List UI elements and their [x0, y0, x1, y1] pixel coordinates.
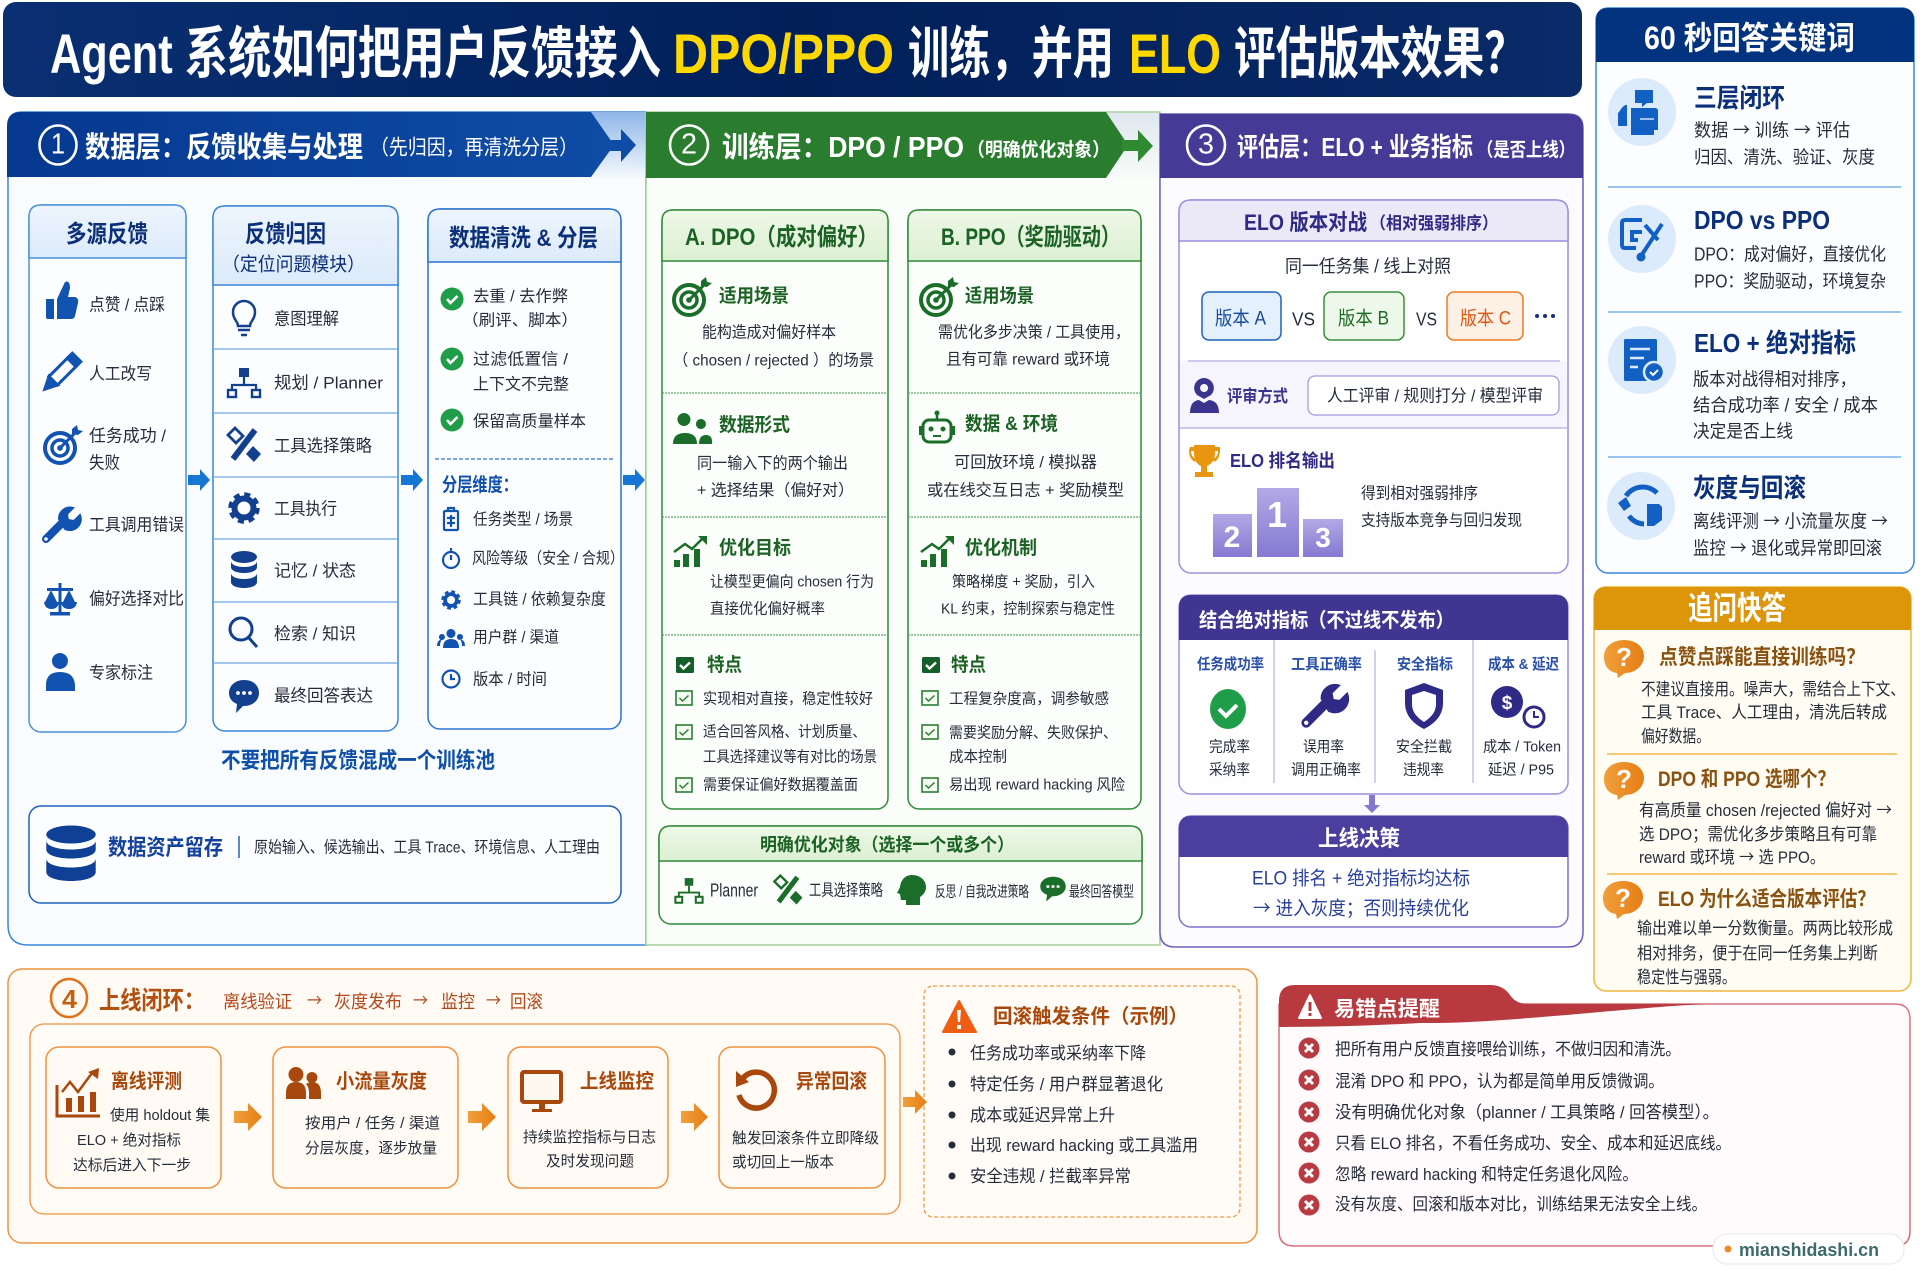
- step: canary release: 小流量灰度: [336, 1070, 427, 1093]
- icon: check: [440, 408, 464, 432]
- panel: evaluation layer: [1160, 114, 1583, 947]
- question 2: 选 DPO；需优化多步策略且有可靠: [1639, 825, 1877, 844]
- card: feedback attribution: 规划 / Planner: [274, 374, 383, 393]
- card: DPO: 直接优化偏好概率: [710, 601, 825, 618]
- arrow: to attribution: [188, 469, 210, 491]
- box: rollback triggers: 特定任务 / 用户群显著退化: [970, 1075, 1163, 1094]
- card: absolute metrics: 完成率: [1209, 739, 1250, 756]
- card: DPO: 需要保证偏好数据覆盖面: [703, 777, 858, 794]
- card: cleaning and layering: 去重 / 去作弊: [473, 288, 568, 306]
- step: offline evaluation: [46, 1047, 221, 1188]
- section header: data layer: 数据层：反馈收集与处理: [85, 131, 363, 164]
- card: PPO: 易出现 reward hacking 风险: [949, 777, 1125, 794]
- icon: check: [440, 288, 464, 310]
- watermark: mianshidashi.cn: [1739, 1240, 1879, 1260]
- title banner: [3, 2, 1582, 97]
- card: DPO: 实现相对直接，稳定性较好: [703, 690, 873, 708]
- card: DPO: 能构造成对偏好样本: [702, 324, 836, 342]
- icon: checked box: [676, 657, 694, 673]
- box: rollback triggers: 安全违规 / 拦截率异常: [970, 1167, 1131, 1186]
- card: cleaning and layering: 数据清洗 & 分层: [449, 225, 598, 252]
- keyword: ELO and metrics: 版本对战得相对排序，: [1693, 370, 1856, 390]
- question 2: [1604, 762, 1892, 868]
- card: multi-source feedback: 点赞 / 点踩: [89, 296, 165, 315]
- icon: pencil: [40, 353, 81, 394]
- card: PPO: 或在线交互日志 + 奖励模型: [927, 482, 1124, 500]
- card: multi-source feedback: [29, 205, 186, 732]
- card: cleaning and layering: 过滤低置信 /: [473, 351, 569, 369]
- box: optimisation targets: 最终回答模型: [1069, 884, 1134, 901]
- card: absolute metrics: 安全指标: [1397, 655, 1453, 673]
- card: ELO version battle: 评审方式: [1227, 386, 1288, 406]
- card: ELO version battle: （相对强弱排序）: [1370, 213, 1498, 233]
- podium: 2: [1224, 521, 1240, 554]
- arrow: to cleaning: [401, 469, 423, 491]
- title banner: 评估版本效果？: [1234, 22, 1526, 85]
- section heading: launch loop: 4: [62, 984, 78, 1014]
- icon: shield: [1405, 683, 1443, 729]
- title banner: Agent 系统如何把用户反馈接入: [50, 22, 661, 85]
- arrow: to decision: [1364, 795, 1380, 813]
- icon: search: [230, 618, 257, 647]
- icon: tool strategy: [774, 876, 802, 904]
- card: feedback attribution: [213, 206, 398, 731]
- card: PPO: KL 约束，控制探索与稳定性: [941, 601, 1115, 618]
- card: multi-source feedback: 失败: [89, 454, 120, 473]
- step: anomaly rollback: 或切回上一版本: [732, 1154, 834, 1171]
- icon: chart: [674, 536, 707, 567]
- badge: version C: 版本 C: [1460, 308, 1511, 330]
- icon: stopwatch: [443, 548, 459, 568]
- podium: 3: [1315, 522, 1331, 553]
- arrow: [681, 1103, 708, 1131]
- section header: training layer: [646, 112, 1153, 178]
- card: ELO version battle: ELO 版本对战: [1244, 210, 1367, 235]
- section header: evaluation layer: （是否上线）: [1477, 139, 1575, 161]
- card: cleaning and layering: [428, 209, 624, 729]
- icon: chart: [921, 536, 954, 567]
- card: DPO: [662, 210, 888, 809]
- title banner: ELO: [1129, 22, 1221, 85]
- card: multi-source feedback: 任务成功 /: [89, 427, 166, 446]
- badge: version B: 版本 B: [1338, 308, 1389, 330]
- card: cleaning and layering: 风险等级（安全 / 合规）: [472, 550, 624, 568]
- keyword: three-layer loop: 归因、清洗、验证、灰度: [1694, 148, 1875, 168]
- card: absolute metrics: [1179, 595, 1568, 794]
- badge: version B: [1324, 292, 1404, 340]
- question 2: DPO 和 PPO 选哪个？: [1658, 768, 1835, 791]
- card: PPO: 成本控制: [949, 749, 1007, 766]
- panel: launch loop: [8, 969, 1257, 1243]
- card: feedback attribution: 记忆 / 状态: [274, 562, 356, 581]
- step: offline evaluation: 达标后进入下一步: [73, 1157, 191, 1174]
- keyword: canary and rollback: 离线评测 → 小流量灰度 →: [1693, 508, 1888, 534]
- card: feedback attribution: 意图理解: [274, 310, 339, 329]
- icon: check: [676, 778, 692, 792]
- card: absolute metrics: 结合绝对指标（不过线不发布）: [1199, 608, 1454, 632]
- callout: do not mix feedback: 不要把所有反馈混成一个训练池: [221, 748, 495, 773]
- keyword: canary and rollback: 监控 → 退化或异常即回滚: [1693, 535, 1882, 561]
- card: ELO version battle: 支持版本竞争与回归发现: [1361, 512, 1522, 530]
- card: cleaning and layering: 保留高质量样本: [473, 413, 586, 431]
- card: multi-source feedback: 多源反馈: [66, 221, 148, 248]
- icon: robot: [919, 410, 955, 442]
- card: DPO: 同一输入下的两个输出: [697, 455, 848, 473]
- icon: trophy: [1189, 445, 1220, 477]
- icon: planner: [228, 368, 260, 397]
- card: feedback attribution: 工具选择策略: [274, 437, 372, 456]
- section heading: launch loop: →: [307, 987, 322, 1013]
- card: absolute metrics: 误用率: [1303, 739, 1344, 756]
- card: DPO: 数据形式: [719, 414, 790, 436]
- section heading: launch loop: →: [413, 987, 428, 1013]
- icon: cost and clock: $: [1502, 693, 1513, 714]
- question 2: 有高质量 chosen /rejected 偏好对 →: [1639, 796, 1892, 821]
- question 1: 偏好数据。: [1641, 727, 1710, 746]
- icon: planner: [675, 878, 703, 903]
- panel: follow-up quick answers: 追问快答: [1688, 590, 1786, 626]
- icon: check: [676, 725, 692, 739]
- card: ELO version battle: 得到相对强弱排序: [1361, 485, 1478, 503]
- card: multi-source feedback: 偏好选择对比: [89, 590, 184, 609]
- mistake 3: 没有明确优化对象（planner / 工具策略 / 回答模型）。: [1335, 1103, 1719, 1122]
- question 3: 输出难以单一分数衡量。两两比较形成: [1637, 919, 1893, 938]
- box: rollback triggers: 任务成功率或采纳率下降: [970, 1044, 1146, 1063]
- icon: database large: [46, 826, 96, 881]
- section header: data layer: （先归因，再清洗分层）: [370, 137, 578, 160]
- card: PPO: 需要奖励分解、失败保护、: [949, 725, 1117, 742]
- mistake 6: 没有灰度、回滚和版本对比，训练结果无法安全上线。: [1335, 1195, 1707, 1214]
- arrow: to training: [623, 469, 645, 491]
- card: cleaning and layering: （刷评、脚本）: [462, 312, 578, 330]
- card: cleaning and layering: 任务类型 / 场景: [473, 511, 573, 529]
- icon: people: [673, 413, 712, 444]
- arrow: [234, 1103, 262, 1131]
- card: DPO: 让模型更偏向 chosen 行为: [710, 574, 874, 591]
- card: launch decision: → 进入灰度；否则持续优化: [1253, 894, 1469, 921]
- box: data assets retained: [29, 806, 621, 903]
- keyword: ELO and metrics: 结合成功率 / 安全 / 成本: [1693, 396, 1878, 416]
- keyword: three-layer loop: 三层闭环: [1694, 83, 1785, 113]
- card: feedback attribution: 检索 / 知识: [274, 625, 356, 644]
- section header: evaluation layer: 3: [1198, 129, 1214, 161]
- icon: success check: [1210, 689, 1246, 729]
- keyword: DPO vs PPO: DPO vs PPO: [1694, 205, 1830, 235]
- podium: [1213, 488, 1343, 557]
- keyword: DPO vs PPO: [1608, 205, 1886, 292]
- section header: data layer: 1: [51, 129, 65, 161]
- card: absolute metrics: 采纳率: [1209, 762, 1250, 779]
- card: DPO: + 选择结果（偏好对）: [697, 482, 854, 500]
- card: PPO: 策略梯度 + 奖励，引入: [952, 574, 1095, 591]
- icon: reflection head: [897, 875, 926, 905]
- card: absolute metrics: 安全拦截: [1396, 738, 1452, 756]
- card: absolute metrics: 成本 & 延迟: [1488, 655, 1559, 673]
- card: ELO version battle: 人工评审 / 规则打分 / 模型评审: [1327, 387, 1543, 406]
- keyword: ELO and metrics: [1608, 326, 1878, 442]
- icon: wrench: [44, 508, 81, 541]
- card: PPO: 且有可靠 reward 或环境: [946, 350, 1110, 369]
- mistake 4: 只看 ELO 排名，不看任务成功、安全、成本和延迟底线。: [1335, 1134, 1731, 1153]
- card: absolute metrics: 调用正确率: [1291, 762, 1361, 779]
- card: PPO: 数据 & 环境: [965, 412, 1058, 435]
- icon: bulb: [233, 301, 255, 335]
- podium: 1: [1267, 494, 1287, 535]
- step: offline evaluation: 使用 holdout 集: [110, 1107, 210, 1124]
- icon: gear: [230, 494, 258, 522]
- card: PPO: 适用场景: [965, 285, 1034, 307]
- card: PPO: 可回放环境 / 模拟器: [954, 453, 1097, 472]
- icon: check: [676, 691, 692, 705]
- card: DPO: 特点: [707, 654, 742, 676]
- step: canary release: 分层灰度，逐步放量: [305, 1140, 437, 1157]
- box: rollback triggers: [924, 986, 1240, 1217]
- icon: tool strategy: [228, 428, 261, 462]
- card: DPO: 工具选择建议等有对比的场景: [703, 748, 877, 766]
- keyword: three-layer loop: [1608, 78, 1875, 168]
- icon: check: [922, 691, 938, 705]
- card: cleaning and layering: 用户群 / 渠道: [473, 629, 559, 647]
- box: rollback triggers: 成本或延迟异常上升: [970, 1106, 1115, 1125]
- step: anomaly rollback: 触发回滚条件立即降级: [732, 1130, 879, 1147]
- section heading: launch loop: 回滚: [510, 992, 543, 1012]
- icon: target: [921, 277, 959, 315]
- card: multi-source feedback: 人工改写: [89, 365, 152, 384]
- icon: checked box: [922, 657, 940, 673]
- card: DPO: 优化目标: [719, 537, 791, 559]
- card: feedback attribution: （定位问题模块）: [222, 254, 365, 276]
- icon: check: [922, 725, 938, 739]
- section header: training layer: 2: [681, 129, 697, 161]
- icon: thumbs up: [46, 282, 78, 319]
- mistake 1: 把所有用户反馈直接喂给训练，不做归因和清洗。: [1335, 1040, 1681, 1059]
- icon: target: [674, 277, 712, 315]
- card: feedback attribution: 工具执行: [274, 500, 337, 519]
- section header: evaluation layer: [1160, 114, 1583, 178]
- icon: users: [437, 629, 465, 648]
- box: optimisation targets: [659, 826, 1142, 924]
- step: offline evaluation: ELO + 绝对指标: [77, 1132, 181, 1149]
- section heading: launch loop: 上线闭环：: [99, 987, 205, 1015]
- section heading: launch loop: [51, 979, 543, 1017]
- card: cleaning and layering: 工具链 / 依赖复杂度: [473, 591, 606, 609]
- icon: gear: [443, 592, 459, 608]
- box: optimisation targets: 工具选择策略: [809, 882, 883, 900]
- keyword: ELO and metrics: ELO + 绝对指标: [1694, 328, 1856, 358]
- step: online monitoring: 及时发现问题: [546, 1153, 634, 1170]
- card: DPO: A. DPO（成对偏好）: [685, 224, 878, 251]
- card: PPO: B. PPO（奖励驱动）: [941, 224, 1120, 251]
- section header: evaluation layer: 评估层：ELO + 业务指标: [1237, 132, 1473, 162]
- question 2: reward 或环境 → 选 PPO。: [1639, 843, 1825, 868]
- section header: training layer: （明确优化对象）: [967, 139, 1110, 161]
- keyword: canary and rollback: 灰度与回滚: [1693, 473, 1806, 503]
- panel: 60 second keywords: [1596, 8, 1914, 573]
- panel: data layer: [7, 112, 646, 945]
- badge: version A: [1202, 292, 1281, 340]
- step: anomaly rollback: [719, 1047, 885, 1188]
- card: ELO version battle: [1179, 200, 1568, 573]
- title banner: 训练，并用: [908, 22, 1114, 85]
- icon: expert person: [46, 653, 75, 691]
- icon: clipboard: [444, 508, 458, 530]
- question 3: ELO 为什么适合版本评估？: [1658, 888, 1875, 911]
- step: offline evaluation: 离线评测: [111, 1069, 182, 1093]
- panel: common mistakes: 易错点提醒: [1334, 998, 1440, 1021]
- keyword: canary and rollback: [1607, 472, 1888, 561]
- icon: warning: [943, 1001, 976, 1032]
- question 1: 点赞点踩能直接训练吗？: [1659, 645, 1865, 669]
- mistake 2: 混淆 DPO 和 PPO，认为都是简单用反馈微调。: [1335, 1072, 1664, 1091]
- badge: version C: [1447, 292, 1523, 340]
- box: rollback triggers: 出现 reward hacking 或工具滥用: [970, 1136, 1198, 1155]
- question 3: [1603, 881, 1893, 987]
- step: anomaly rollback: 异常回滚: [796, 1069, 867, 1093]
- question 3: 相对排务，便于在同一任务集上判断: [1637, 944, 1878, 963]
- icon: database: [231, 551, 257, 588]
- card: PPO: 优化机制: [965, 537, 1037, 559]
- panel: 60 second keywords: 60 秒回答关键词: [1644, 20, 1855, 56]
- icon: wrench: [1304, 685, 1348, 725]
- box: optimisation targets: 明确优化对象（选择一个或多个）: [760, 834, 1014, 855]
- arrow: [468, 1103, 496, 1131]
- question 1: 工具 Trace、人工理由，清洗后转成: [1641, 703, 1887, 722]
- card: ELO version battle: 同一任务集 / 线上对照: [1285, 257, 1451, 277]
- card: feedback attribution: 反馈归因: [245, 221, 326, 248]
- section header: data layer: [7, 112, 636, 177]
- icon: clock: [442, 670, 460, 688]
- card: DPO: 适用场景: [719, 285, 789, 307]
- card: absolute metrics: 工具正确率: [1291, 655, 1362, 673]
- keyword: three-layer loop: 数据 → 训练 → 评估: [1694, 117, 1850, 143]
- card: DPO: 适合回答风格、计划质量、: [703, 724, 866, 741]
- card: absolute metrics: 成本 / Token: [1483, 739, 1561, 756]
- card: multi-source feedback: 工具调用错误: [89, 516, 184, 535]
- box: optimisation targets: 反思 / 自我改进策略: [935, 884, 1029, 901]
- keyword: DPO vs PPO: PPO：奖励驱动，环境复杂: [1694, 272, 1886, 292]
- section header: training layer: 训练层：DPO / PPO: [722, 131, 964, 164]
- question 3: 稳定性与强弱。: [1637, 968, 1736, 987]
- icon: cost and clock: [1491, 686, 1544, 727]
- mistake 5: 忽略 reward hacking 和特定任务退化风险。: [1335, 1165, 1638, 1184]
- card: multi-source feedback: 专家标注: [89, 664, 153, 683]
- box: data assets retained: 原始输入、候选输出、工具 Trace、环境信息、人工理由: [254, 838, 600, 857]
- card: PPO: [908, 210, 1141, 809]
- arrow: to triggers: [903, 1090, 927, 1114]
- card: PPO: 特点: [951, 654, 986, 676]
- icon: scale: [44, 583, 77, 616]
- step: canary release: [273, 1047, 458, 1188]
- panel: follow-up quick answers: [1594, 587, 1911, 991]
- card: cleaning and layering: 版本 / 时间: [473, 671, 547, 689]
- box: rollback triggers: 回滚触发条件（示例）: [993, 1004, 1188, 1028]
- panel: common mistakes: [1279, 985, 1910, 1246]
- title banner: DPO/PPO: [673, 22, 894, 85]
- card: launch decision: ELO 排名 + 绝对指标均达标: [1252, 868, 1470, 890]
- card: absolute metrics: 违规率: [1403, 762, 1444, 779]
- card: launch decision: [1179, 816, 1568, 927]
- card: cleaning and layering: 分层维度：: [442, 473, 518, 496]
- step: online monitoring: 上线监控: [580, 1070, 654, 1093]
- icon: check: [440, 348, 464, 370]
- icon: check: [922, 778, 938, 792]
- card: ELO version battle: VS: [1292, 310, 1315, 330]
- watermark: [1713, 1234, 1904, 1264]
- step: online monitoring: 持续监控指标与日志: [523, 1129, 656, 1146]
- question 1: [1604, 640, 1905, 746]
- icon: target: [45, 425, 83, 463]
- card: PPO: 需优化多步决策 / 工具使用，: [938, 324, 1130, 342]
- header tab: [1279, 985, 1707, 1027]
- section heading: launch loop: 灰度发布: [334, 992, 402, 1012]
- card: ELO version battle: VS: [1416, 310, 1437, 330]
- keyword: ELO and metrics: 决定是否上线: [1693, 422, 1793, 442]
- step: canary release: 按用户 / 任务 / 渠道: [305, 1115, 440, 1132]
- card: launch decision: 上线决策: [1318, 826, 1400, 851]
- card: DPO: （ chosen / rejected ）的场景: [673, 352, 874, 370]
- icon: reviewer: [1190, 378, 1219, 413]
- card: ELO version battle: ELO 排名输出: [1230, 450, 1335, 471]
- card: feedback attribution: 最终回答表达: [274, 687, 373, 706]
- badge: version A: 版本 A: [1215, 308, 1266, 330]
- box: optimisation targets: Planner: [710, 881, 758, 901]
- section heading: launch loop: 监控: [441, 992, 475, 1012]
- icon: chat: [229, 680, 259, 713]
- card: cleaning and layering: 上下文不完整: [473, 376, 569, 394]
- card: absolute metrics: 任务成功率: [1197, 655, 1264, 673]
- section heading: launch loop: 离线验证: [223, 992, 292, 1012]
- step: online monitoring: [508, 1047, 668, 1188]
- box: data assets retained: 数据资产留存: [108, 835, 223, 860]
- card: absolute metrics: 延迟 / P95: [1488, 762, 1554, 779]
- section heading: launch loop: →: [486, 987, 501, 1013]
- panel: training layer: [646, 112, 1160, 945]
- card: PPO: 工程复杂度高，调参敏感: [949, 690, 1109, 708]
- icon: answer bubble: [1040, 877, 1066, 902]
- keyword: DPO vs PPO: DPO：成对偏好，直接优化: [1694, 245, 1886, 265]
- icon: warning white: [1299, 995, 1321, 1018]
